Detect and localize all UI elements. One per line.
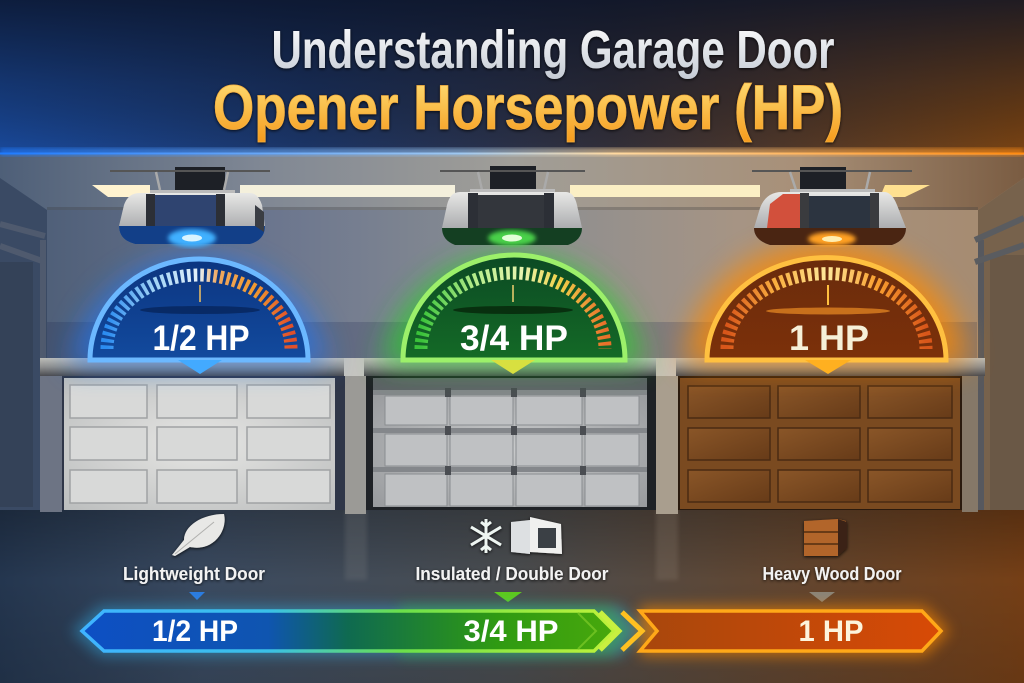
tick marks [727,274,926,349]
horsepower scale bar [72,606,950,656]
label: insulated double door: Insulated / Double Door [416,564,608,584]
bar segment: blue to green [82,611,614,651]
value: 1/2 HP: 1/2 HP [152,615,238,648]
title [213,20,843,143]
opener 3 [752,167,912,246]
chevrons [578,613,596,649]
value: 1 HP: 1 HP [798,615,864,648]
ceiling [0,155,1024,210]
needle [199,285,201,302]
pointer [491,360,535,374]
door 1 [47,376,345,510]
icon: snowflake [471,519,501,553]
value: 1 HP [789,319,869,358]
gauge 1/2 HP [70,256,328,374]
label: heavy wood door: Heavy Wood Door [762,564,902,584]
header band [0,0,1024,156]
icon: feather [172,514,225,556]
door 3 [676,376,966,510]
icon: wood block [804,519,847,556]
tick marks [421,273,605,349]
opener 1 [110,167,270,247]
bar segment: orange [640,611,941,651]
gauge 3/4 HP [382,254,644,374]
title: Understanding Garage Door [272,20,834,80]
floor [0,510,1024,683]
pointer [805,360,851,374]
value: 3/4 HP [460,319,568,358]
value: 1/2 HP [152,319,250,358]
needle [512,285,514,302]
right side wall [978,178,1024,520]
left side wall [0,178,47,520]
tick marks [107,275,291,349]
markers [189,592,835,602]
title: Opener Horsepower (HP) [213,73,843,143]
opener 2 [440,166,585,246]
door 2 [365,376,658,510]
pointer [178,360,222,374]
value: 3/4 HP: 3/4 HP [464,615,558,648]
needle [827,285,829,305]
icon: insulated door panel [511,517,562,554]
side tracks [0,218,1024,510]
label: lightweight door: Lightweight Door [123,564,265,584]
pillars and header beam [40,358,985,514]
gauge 1 HP [686,241,966,374]
ceiling lights [92,185,930,197]
